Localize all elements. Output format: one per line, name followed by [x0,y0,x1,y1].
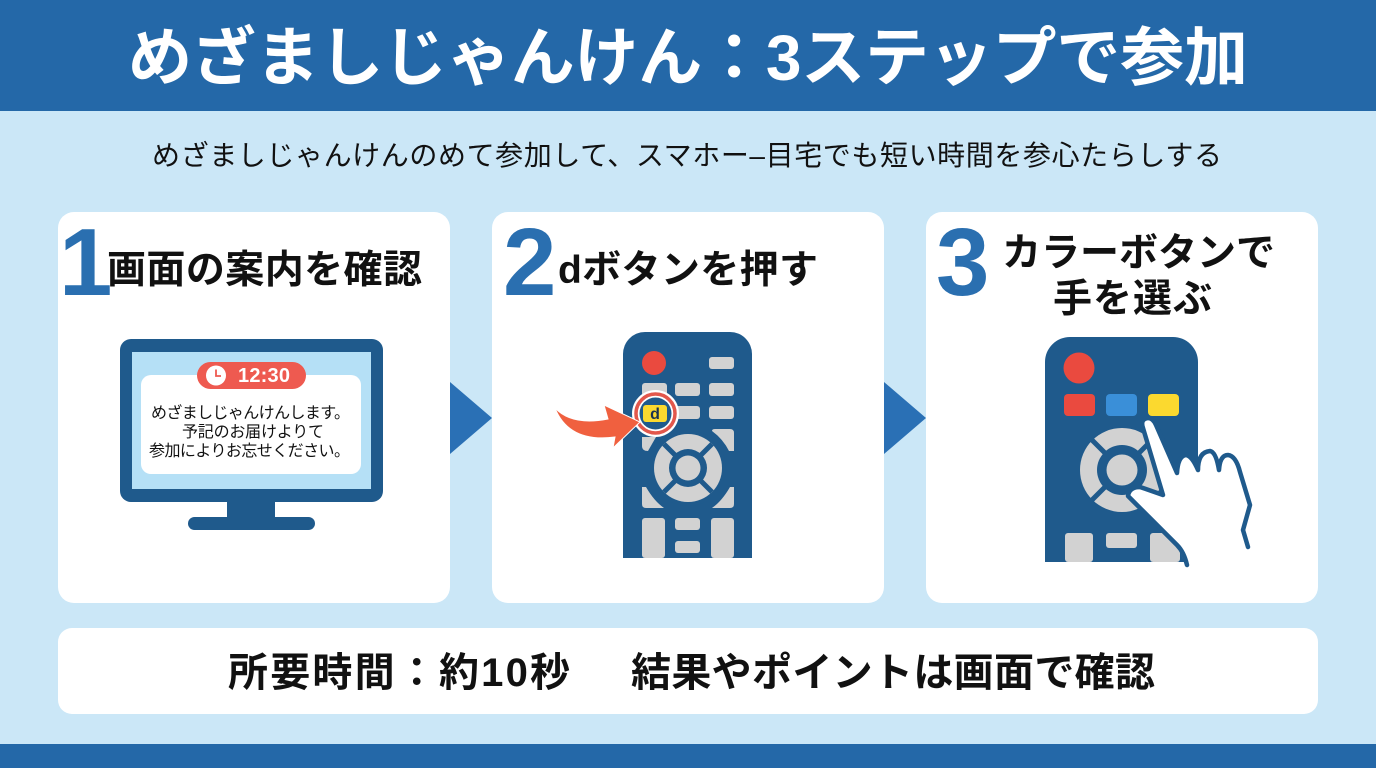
step 3 heading: 手を選ぶ [1053,278,1212,321]
highlighted d button [632,390,679,437]
notice text [149,403,350,460]
notice text: 予記のお届けよりて [182,423,324,441]
panel: step 2 [492,209,884,603]
icon: remote with d button [555,332,752,558]
clock time badge [197,362,306,389]
arrow: step 1 to 2 [450,382,492,454]
panel: summary bar [58,628,1318,714]
icon: remote with colour buttons and hand [1045,337,1250,568]
step 2 heading: dボタンを押す [558,249,818,292]
step 1 number: 1 [59,209,112,316]
header band [0,0,1376,111]
step 1 heading: 画面の案内を確認 [107,249,422,292]
notice text: 参加によりお忘せください。 [149,442,350,460]
results note: 結果やポイントは画面で確認 [631,651,1155,695]
highlighted d button: d [650,406,660,423]
footer band [0,744,1376,768]
directional pad [650,430,726,506]
icon: television with notice [120,339,383,530]
icon: pointing hand [1128,418,1250,568]
notice text: めざましじゃんけんします。 [151,403,350,422]
pointing arrow [555,405,640,448]
required time: 所要時間：約10秒 [228,651,570,695]
panel: step 3 [926,209,1318,603]
step 3 heading [1002,232,1275,321]
subtitle: めざましじゃんけんのめて参加して、スマホー–目宅でも短い時間を参心たらしする [152,140,1222,171]
title: めざましじゃんけん：3ステップで参加 [128,22,1248,94]
step 2 number: 2 [503,209,556,316]
panel: step 1 [58,209,450,603]
clock time badge: 12:30 [238,365,290,387]
directional pad [1080,428,1164,512]
step 3 heading: カラーボタンで [1002,232,1275,275]
step 3 number: 3 [936,209,989,316]
arrow: step 2 to 3 [884,382,926,454]
